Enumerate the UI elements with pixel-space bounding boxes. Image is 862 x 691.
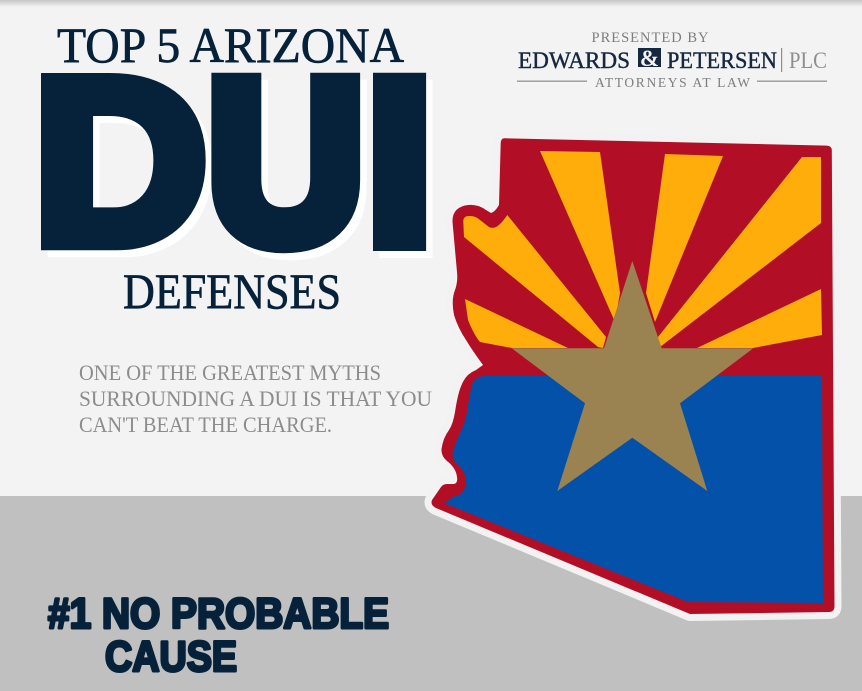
law firm logo: PRESENTED BY — [592, 30, 709, 46]
law firm logo: PLC — [789, 48, 827, 73]
state white halo — [432, 138, 834, 614]
arizona flag state map — [432, 138, 834, 614]
section heading: no probable cause: CAUSE — [105, 633, 237, 681]
law firm logo: ATTORNEYS AT LAW — [595, 75, 750, 90]
intro text block — [79, 360, 432, 437]
law firm logo — [517, 30, 827, 90]
law firm logo: PETERSEN — [667, 48, 777, 73]
intro text block: ONE OF THE GREATEST MYTHS — [79, 360, 381, 385]
gold star — [512, 261, 753, 491]
bottom grey band — [0, 496, 862, 691]
DUI white shadow — [40, 39, 438, 299]
section heading: no probable cause: #1 NO PROBABLE — [48, 590, 389, 638]
title: defenses: DEFENSES — [123, 263, 341, 319]
DUI navy letters — [34, 32, 432, 292]
DUI white shadow: I — [374, 40, 438, 297]
law firm logo: EDWARDS — [518, 48, 630, 73]
section heading: no probable cause — [48, 590, 389, 681]
DUI navy letters: D — [34, 32, 207, 292]
intro text block: SURROUNDING A DUI IS THAT YOU — [79, 386, 432, 411]
gold sun rays — [463, 151, 822, 348]
ampersand badge: & — [640, 46, 659, 71]
title: DUI large lettering — [34, 32, 438, 299]
title: top 5 arizona: TOP 5 ARIZONA — [57, 17, 404, 73]
DUI navy letters: U — [208, 34, 364, 290]
DUI white shadow: D — [40, 39, 214, 299]
DUI white shadow: U — [214, 41, 370, 297]
DUI navy letters: I — [368, 33, 432, 290]
intro text block: CAN'T BEAT THE CHARGE. — [79, 412, 332, 437]
blue lower field — [444, 376, 823, 603]
state red outline — [432, 138, 834, 614]
